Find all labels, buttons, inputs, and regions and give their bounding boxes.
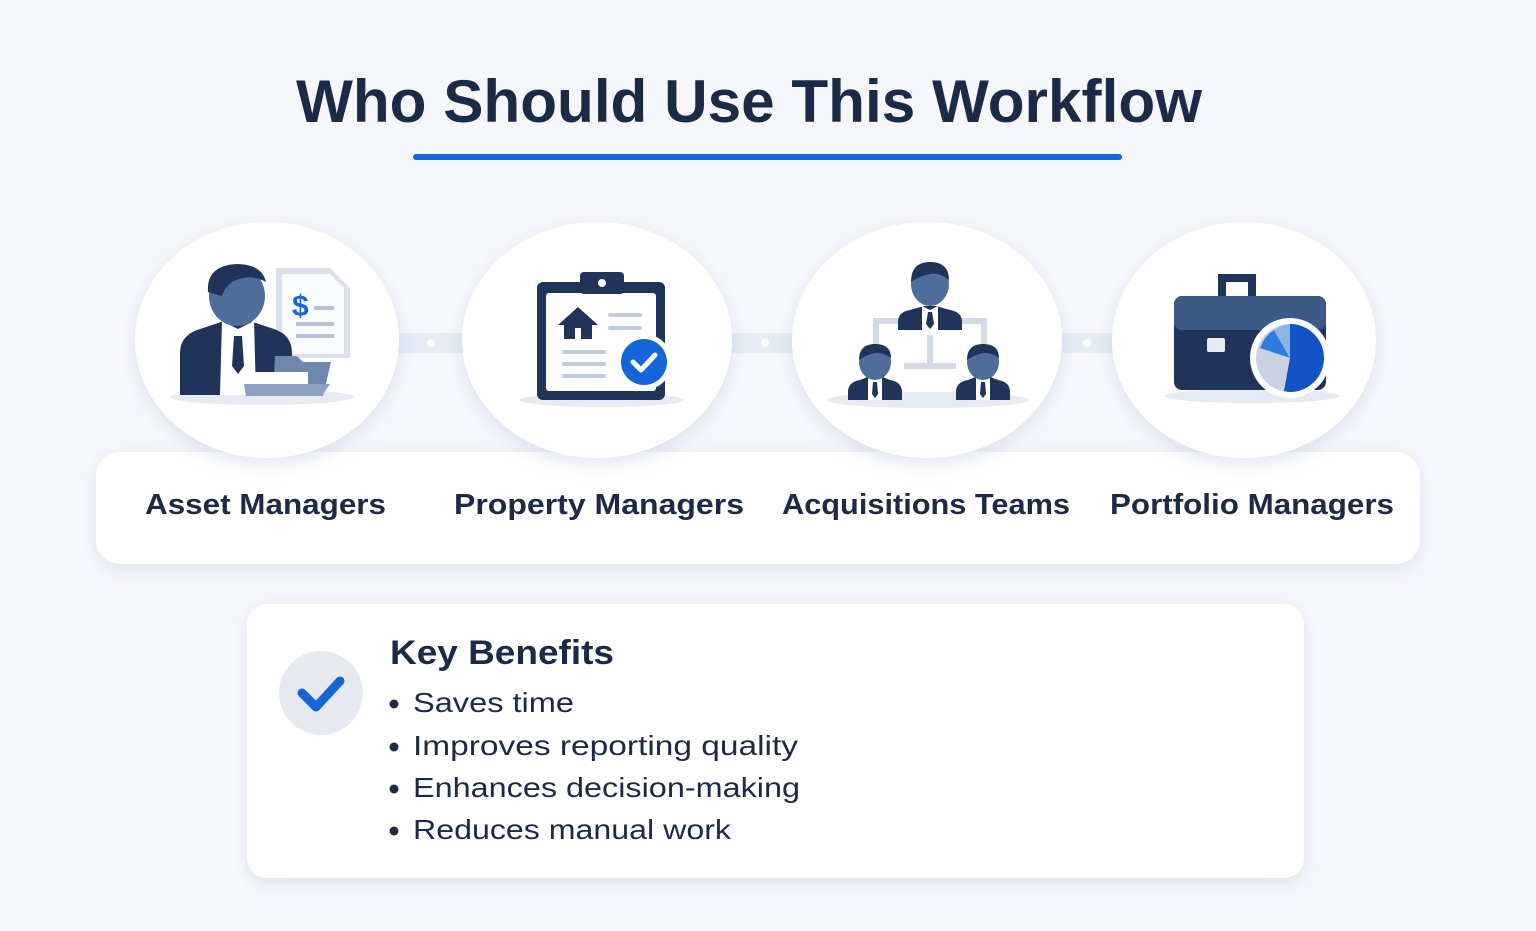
benefits list: Improves reporting quality — [413, 730, 798, 761]
connector band — [380, 333, 1140, 353]
label: Asset Managers: Asset Managers — [145, 489, 386, 521]
label: Acquisitions Teams: Acquisitions Teams — [782, 489, 1070, 521]
label: Portfolio Managers: Portfolio Managers — [1110, 489, 1394, 521]
icon: portfolio briefcase — [1112, 222, 1376, 458]
benefits list: Reduces manual work — [413, 814, 732, 845]
label: Property Managers: Property Managers — [454, 489, 744, 521]
benefits list — [390, 687, 800, 845]
title underline — [413, 154, 1122, 160]
heading: Key Benefits: Key Benefits — [390, 634, 614, 672]
label bar — [96, 452, 1420, 564]
icon: property clipboard — [462, 222, 732, 458]
title: Who Should Use This Workflow — [296, 68, 1202, 135]
benefits list: Saves time — [413, 687, 574, 718]
benefits list: Enhances decision-making — [413, 772, 800, 803]
icon: asset manager: $ — [292, 290, 309, 323]
icon: asset manager — [135, 222, 399, 458]
panel: key benefits — [247, 604, 1304, 878]
icon: acquisitions team — [792, 222, 1062, 458]
icon: check badge — [279, 651, 363, 735]
